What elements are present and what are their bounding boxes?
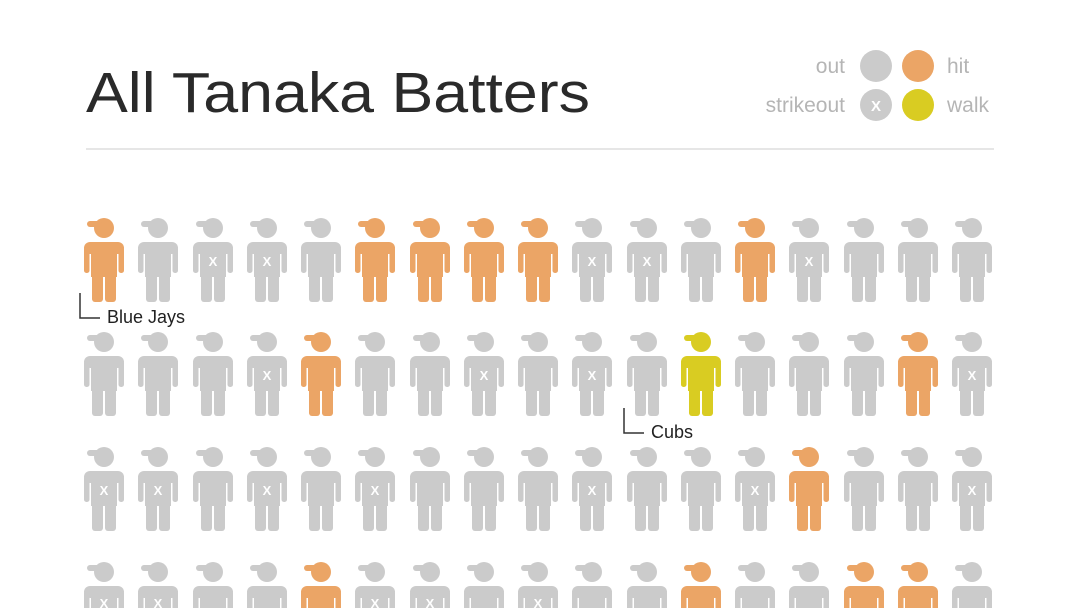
- row 1: X: [263, 254, 272, 269]
- row 3: X: [263, 483, 272, 498]
- batter grid: [84, 218, 992, 608]
- row 3: X: [751, 483, 760, 498]
- row 1: X: [209, 254, 218, 269]
- row 4: [84, 562, 992, 608]
- row 2: X: [263, 368, 272, 383]
- row 2: X: [588, 368, 597, 383]
- legend: out: [816, 55, 845, 78]
- legend: [766, 50, 990, 121]
- row 3: X: [154, 483, 163, 498]
- row 2: X: [968, 368, 977, 383]
- legend: strikeout: [766, 94, 845, 117]
- label: Blue Jays: Blue Jays: [107, 307, 185, 327]
- label: Cubs: [624, 408, 693, 442]
- legend: hit: [947, 55, 969, 78]
- row 3: X: [968, 483, 977, 498]
- label: Cubs: Cubs: [651, 422, 693, 442]
- row 2: X: [480, 368, 489, 383]
- label: Blue Jays: [80, 293, 185, 327]
- row 3: X: [371, 483, 380, 498]
- row 1: X: [805, 254, 814, 269]
- row 1: X: [588, 254, 597, 269]
- title: All Tanaka Batters: [86, 61, 590, 125]
- row 3: [84, 447, 992, 531]
- row 1: X: [643, 254, 652, 269]
- row 3: X: [588, 483, 597, 498]
- legend: walk: [946, 94, 990, 117]
- legend: X: [871, 98, 881, 115]
- row 1: [84, 218, 992, 302]
- row 3: X: [100, 483, 109, 498]
- row 2: [84, 332, 992, 416]
